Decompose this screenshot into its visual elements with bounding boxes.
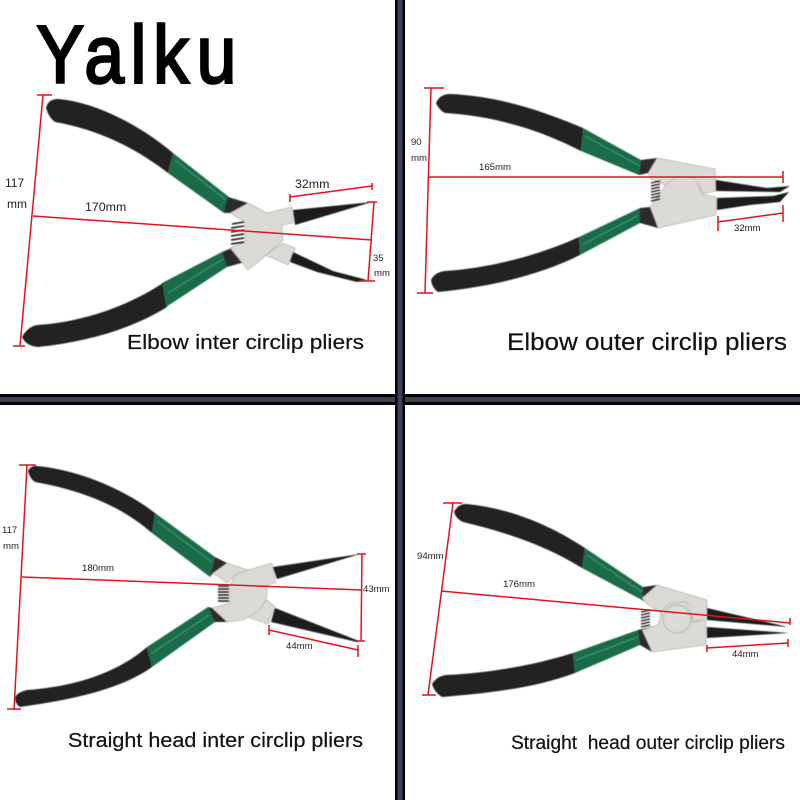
label: 44mm: 44mm: [732, 649, 759, 660]
caption: Elbow inter circlip pliers: [127, 332, 364, 354]
label: 44mm: 44mm: [286, 641, 313, 652]
label: 117 mm: mm: [7, 197, 27, 211]
label: 117 mm: 117: [2, 525, 17, 536]
label: 117 mm: [2, 525, 19, 552]
label: 180mm: 180mm: [82, 563, 114, 574]
label: 165mm: 165mm: [479, 162, 511, 173]
label: 43mm: 43mm: [363, 584, 390, 595]
panel: straight head outer circlip pliers: [417, 503, 790, 754]
panel: elbow inter circlip pliers: [5, 95, 390, 354]
caption: Elbow outer circlip pliers: [507, 329, 787, 356]
title: Yalku: [37, 9, 236, 101]
label: 90 mm: mm: [411, 153, 427, 164]
label: 35 mm: [373, 253, 390, 279]
label: 117 mm: 117: [5, 176, 24, 190]
label: 90 mm: [411, 137, 427, 164]
dimension lines: [422, 503, 790, 695]
label: 32mm: 32mm: [295, 177, 329, 191]
label: 176mm: 176mm: [503, 579, 535, 590]
label: 32mm: 32mm: [734, 223, 761, 234]
dimension lines: [417, 88, 783, 293]
label: 117 mm: mm: [3, 541, 19, 552]
caption: Straight head outer circlip pliers: [511, 733, 785, 754]
label: 90 mm: 90: [411, 137, 422, 148]
label: 94mm: 94mm: [417, 551, 444, 562]
pliers: elbow outer: [431, 94, 790, 292]
pliers: elbow inter: [22, 99, 372, 347]
panel: straight head inter circlip pliers: [2, 465, 390, 752]
caption: Straight head inter circlip pliers: [68, 730, 363, 752]
dimension lines: [13, 95, 377, 346]
pliers: straight outer: [432, 504, 789, 697]
label: 35 mm: 35: [373, 253, 384, 264]
label: 117 mm: [5, 176, 27, 211]
dimension lines: [7, 465, 366, 710]
pliers: straight inter: [15, 466, 360, 707]
panel: elbow outer circlip pliers: [411, 88, 790, 356]
label: 35 mm: mm: [374, 268, 390, 279]
label: 170mm: 170mm: [85, 200, 126, 214]
